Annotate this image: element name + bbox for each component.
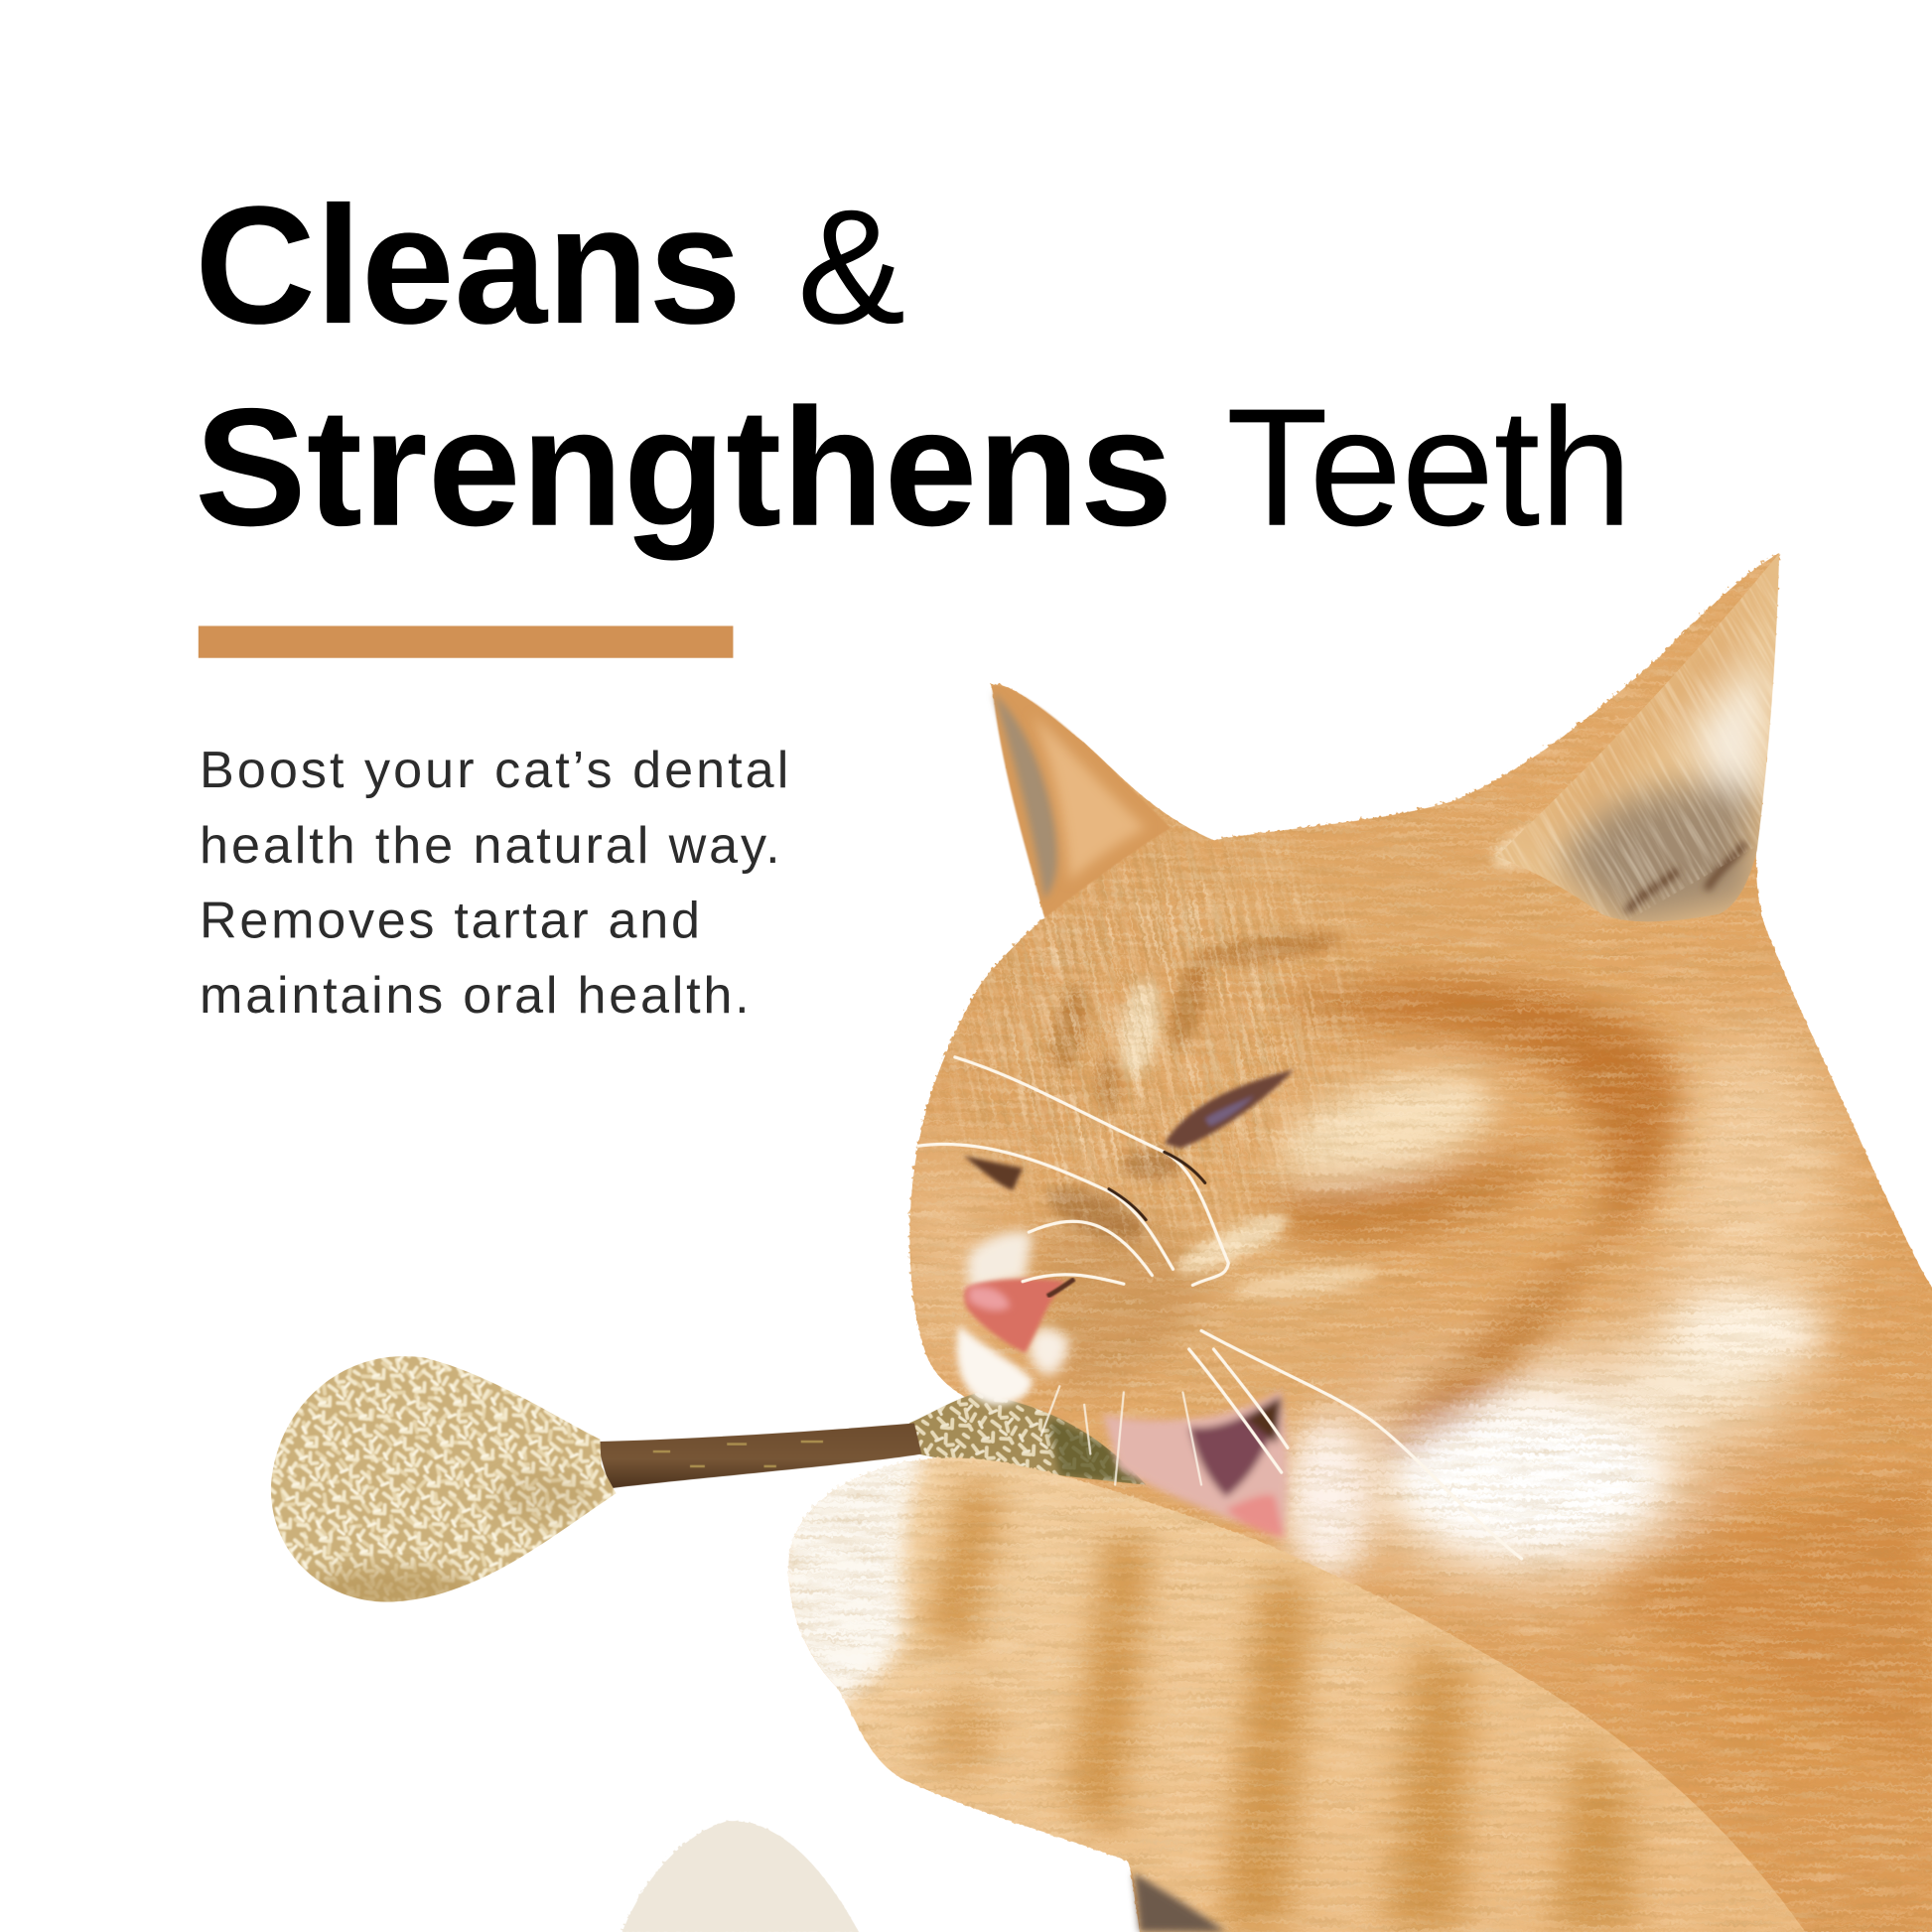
fur texture xyxy=(888,542,1932,1932)
icon: pink nose xyxy=(964,1279,1074,1353)
icon: catnip ball xyxy=(259,1343,628,1614)
arm stripes xyxy=(918,1478,1632,1932)
forehead stripes xyxy=(1041,926,1344,1251)
icon: whiskers xyxy=(918,1057,1522,1559)
icon: second cat paw at bottom xyxy=(622,1821,859,1932)
body text: maintains oral health. xyxy=(200,967,750,1025)
fur texture xyxy=(776,1442,1836,1932)
illustration: cat front paw and arm xyxy=(776,1442,1836,1932)
illustration: orange cat head and body xyxy=(907,553,1932,1932)
body text: Removes tartar and xyxy=(200,892,700,949)
icon: left ear xyxy=(992,685,1171,918)
title xyxy=(195,171,1632,561)
body text: Boost your cat’s dental xyxy=(200,742,788,799)
icon: matatabi stick xyxy=(597,1423,921,1488)
body text xyxy=(200,742,788,1025)
white paw tip xyxy=(776,1442,930,1707)
title: Teeth xyxy=(1226,373,1632,561)
dark fur under arm xyxy=(1134,1872,1226,1932)
icon: left closed eye xyxy=(964,1156,1023,1190)
accent bar xyxy=(199,625,733,658)
icon: catnip tip at mouth xyxy=(909,1394,1146,1485)
icon: right closed eye xyxy=(1165,1069,1294,1149)
icon: open mouth xyxy=(1103,1390,1288,1538)
body text: health the natural way. xyxy=(200,817,780,875)
title: & xyxy=(797,176,905,357)
icon: white muzzle xyxy=(957,1231,1069,1405)
icon: right ear xyxy=(1497,554,1779,921)
title: Cleans xyxy=(195,171,742,358)
broad colour patches xyxy=(904,838,1928,1799)
title: Strengthens xyxy=(195,373,1173,561)
